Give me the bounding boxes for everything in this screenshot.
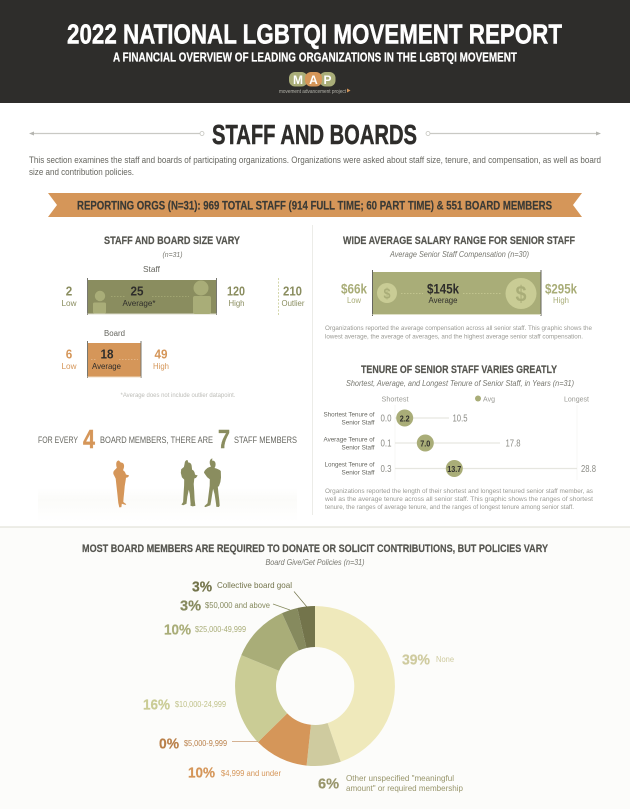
label: $10,000-24,999 [143, 696, 226, 714]
row: shortest tenure [324, 410, 468, 426]
subheading: Board Give/Get Policies (n=31) [266, 558, 365, 567]
label: none [402, 652, 455, 668]
salary note [325, 325, 592, 340]
label: $4,999 and under [188, 764, 281, 782]
label: other unspecified: Other unspecified "meaningful [346, 774, 454, 783]
board range bar: Average [92, 361, 121, 371]
staff range bar: Average* [122, 298, 156, 308]
salary bar [341, 270, 577, 316]
row: average tenure: Senior Staff [342, 444, 375, 452]
subheading: (n=31) [162, 250, 183, 259]
label: other unspecified: 6% [318, 776, 339, 792]
row: longest tenure: 13.7 [447, 465, 462, 474]
row: average tenure [324, 434, 521, 452]
heading: WIDE AVERAGE SALARY RANGE FOR SENIOR STAFF [343, 235, 575, 247]
tenure note: well as the average tenure across all senior staff. This graphic shows the ranges of shortest [324, 496, 593, 503]
board range bar: High [153, 361, 169, 371]
salary bar: $295k [545, 282, 577, 296]
ratio statement: STAFF MEMBERS [234, 435, 297, 445]
label: none: 39% [402, 652, 430, 668]
board range bar: 49 [154, 346, 168, 362]
board range bar [62, 329, 169, 378]
legend: Longest [564, 394, 590, 404]
staff range bar: 25 [130, 284, 144, 298]
salary bar: Low [347, 295, 362, 305]
ratio statement: BOARD MEMBERS, THERE ARE [100, 435, 213, 445]
salary note: Organizations reported the average compensation across all senior staff. This graphic shows the [325, 325, 592, 332]
staff range bar: 120 [227, 284, 245, 298]
tenure note [324, 488, 594, 511]
tenure note: Organizations reported the length of their shortest and longest tenured senior staff member, as [325, 488, 594, 495]
panel: salary range [325, 235, 592, 340]
ratio statement [38, 424, 297, 454]
salary note: lowest average, the average of averages, and the highest average senior staff compensation. [325, 334, 583, 340]
icon: large coin [506, 278, 536, 309]
row: shortest tenure: 10.5 [452, 414, 468, 424]
row: longest tenure: 28.8 [581, 464, 596, 475]
panel: staff and board size [62, 235, 305, 399]
board range bar: Board [104, 329, 125, 338]
label: $10,000-24,999: $10,000-24,999 [175, 700, 226, 709]
row: average tenure: Average Tenure of [324, 436, 375, 444]
row: longest tenure: Senior Staff [342, 470, 375, 476]
intro text [29, 155, 601, 177]
banner [48, 193, 582, 217]
label: $5,000-9,999: 0% [159, 736, 179, 752]
label: $50,000 and above: 3% [180, 598, 201, 614]
staff range bar: Outlier [282, 298, 305, 308]
heading: TENURE OF SENIOR STAFF VARIES GREATLY [361, 364, 558, 376]
label: $25,000-49,999 [164, 622, 246, 638]
salary bar: High [553, 295, 569, 305]
label: none: None [436, 655, 455, 664]
legend: Shortest [382, 394, 409, 404]
row: average tenure: 17.8 [506, 438, 521, 450]
label: $4,999 and under: 10% [188, 764, 215, 782]
row: average tenure: 7.0 [420, 440, 431, 448]
logo: MAP: movement advancement project [279, 89, 347, 95]
board range bar: Low [62, 361, 77, 371]
heading: MOST BOARD MEMBERS ARE REQUIRED TO DONATE OR SOLICIT CONTRIBUTIONS, BUT POLICIES VARY [82, 543, 549, 555]
footnote: *Average does not include outlier datapoint. [120, 392, 236, 399]
section heading: staff and boards [29, 119, 601, 150]
row: longest tenure: 0.3 [380, 464, 392, 475]
row: shortest tenure: 0.0 [380, 414, 392, 424]
row: average tenure: 0.1 [380, 438, 392, 450]
label: other unspecified: amount" or required membership [346, 784, 463, 793]
salary bar: Average [428, 295, 458, 305]
label: $10,000-24,999: 16% [143, 696, 170, 714]
staff range bar: Low [62, 298, 77, 308]
floor shadow [38, 488, 297, 522]
board range bar: 6 [66, 346, 72, 362]
label: $50,000 and above: $50,000 and above [205, 601, 271, 610]
icon: board member silhouette [113, 460, 129, 507]
row: longest tenure [324, 460, 596, 477]
row: longest tenure: Longest Tenure of [324, 462, 375, 468]
staff range bar [62, 265, 305, 315]
donut chart [235, 606, 395, 766]
ratio statement: 4 [83, 424, 95, 454]
logo: MAP [279, 72, 350, 95]
label: collective board goal: 3% [192, 578, 212, 596]
staff range bar: Staff [143, 265, 161, 274]
section heading: staff and boards: STAFF AND BOARDS [212, 119, 417, 150]
label: collective board goal [192, 578, 307, 607]
header band [0, 0, 630, 103]
row: shortest tenure: Senior Staff [342, 420, 375, 426]
logo: MAP: A [309, 73, 318, 87]
label: $5,000-9,999 [159, 736, 258, 752]
salary bar: $66k [341, 282, 367, 296]
label: $5,000-9,999: $5,000-9,999 [184, 739, 227, 748]
column divider [312, 225, 314, 515]
logo: MAP: M [293, 73, 303, 87]
icon: small coin [377, 283, 397, 303]
tenure note: tenure, the ranges of average tenure, and the ranges of longest tenure among senior staff. [325, 504, 574, 511]
logo: MAP: P [323, 73, 332, 87]
panel: tenure [324, 364, 596, 511]
label: $25,000-49,999: $25,000-49,999 [195, 625, 246, 634]
tenure chart [324, 405, 596, 480]
icon: small coin: $ [384, 286, 391, 302]
row: shortest tenure: 2.2 [400, 414, 410, 424]
row: shortest tenure: Shortest Tenure of [324, 412, 375, 418]
board range bar: 18 [100, 348, 114, 362]
label: $25,000-49,999: 10% [164, 622, 191, 638]
salary bar: $145k [427, 282, 459, 296]
legend: Avg [483, 394, 495, 404]
subheading: Average Senior Staff Compensation (n=30) [389, 250, 529, 259]
panel: board give/get policies [0, 527, 630, 809]
label: $4,999 and under: $4,999 and under [221, 769, 281, 778]
subheading: Shortest, Average, and Longest Tenure of Senior Staff, in Years (n=31) [346, 379, 574, 388]
icon: large coin: $ [516, 282, 526, 306]
label: other unspecified [318, 774, 463, 793]
intro text: size and contribution policies. [29, 167, 134, 177]
subtitle: A FINANCIAL OVERVIEW OF LEADING ORGANIZATIONS IN THE LGBTQI MOVEMENT [113, 50, 517, 64]
staff range bar: 210 [283, 284, 302, 298]
label: collective board goal: Collective board goal [217, 580, 292, 590]
staff range bar: High [228, 298, 245, 308]
heading: STAFF AND BOARD SIZE VARY [104, 235, 241, 247]
icon: staff member silhouettes [181, 459, 221, 507]
ratio statement: FOR EVERY [38, 435, 78, 445]
staff range bar: 2 [66, 284, 72, 298]
legend [382, 394, 590, 404]
label: $50,000 and above [180, 598, 290, 614]
ratio statement: 7 [218, 424, 230, 454]
